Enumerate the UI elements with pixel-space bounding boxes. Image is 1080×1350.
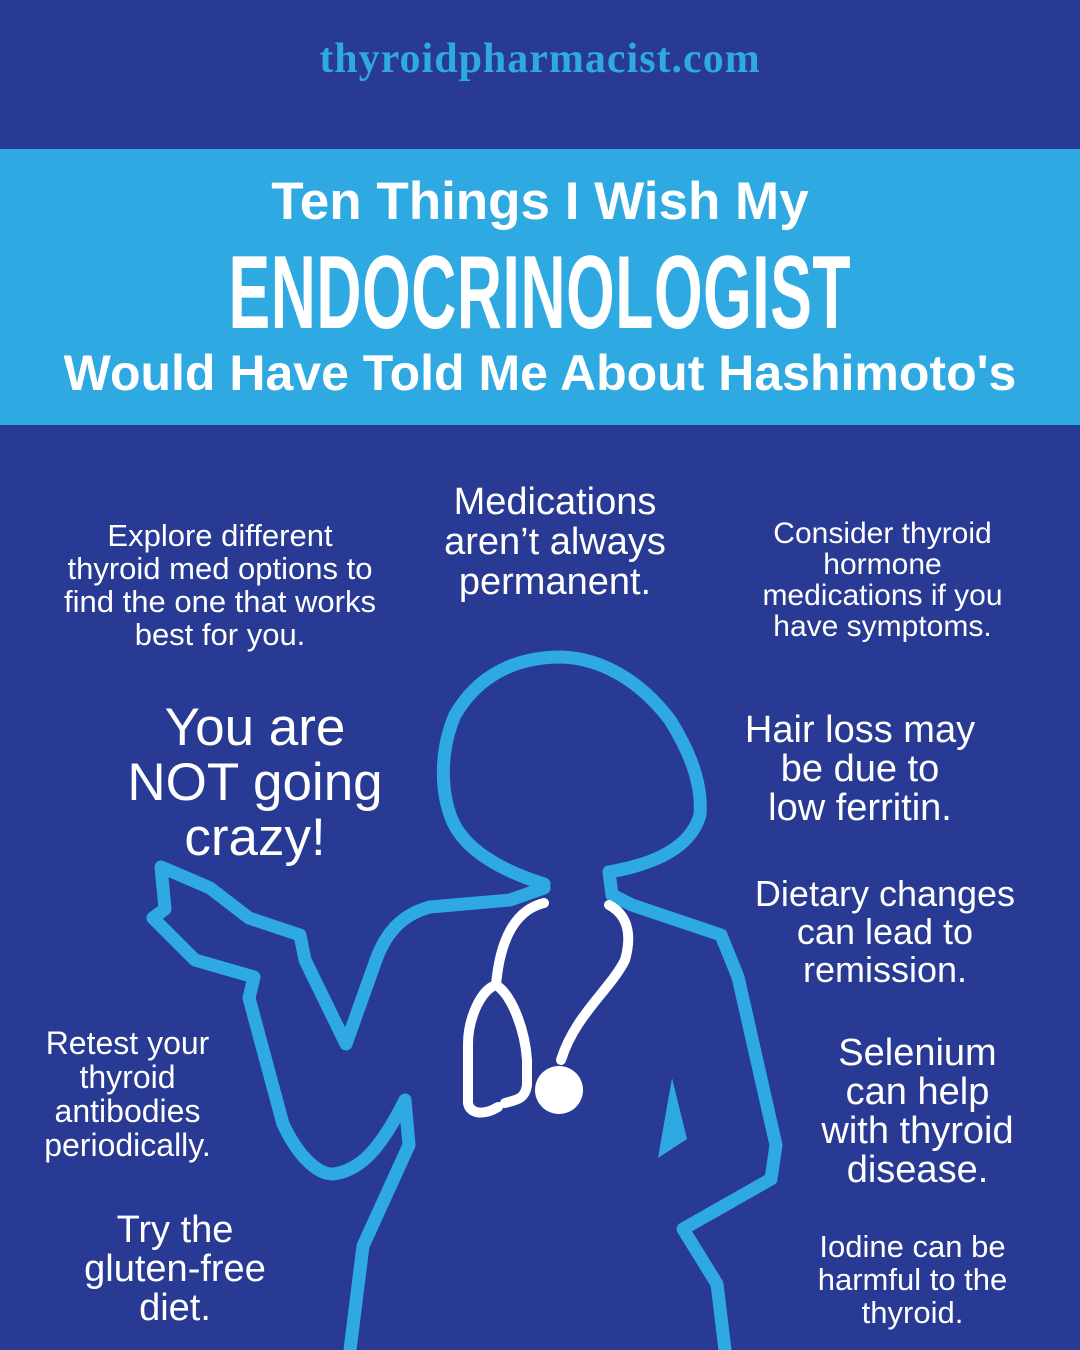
- tip: consider hormone: [762, 517, 1003, 643]
- tip: med options: thyroid med options to: [67, 551, 372, 586]
- tip: iodine: [818, 1229, 1007, 1330]
- lapel triangle: [658, 1078, 687, 1158]
- tip: retest antibodies: thyroid: [79, 1059, 176, 1095]
- tip: consider hormone: medications if you: [762, 579, 1003, 612]
- tip: iodine: thyroid.: [862, 1295, 963, 1330]
- tip: iodine: Iodine can be: [819, 1229, 1006, 1264]
- tip: hair loss: [745, 709, 975, 829]
- tip: selenium: with thyroid: [821, 1110, 1014, 1152]
- tip: gluten-free: gluten-free: [84, 1248, 266, 1290]
- tip: dietary changes: [755, 873, 1015, 990]
- tip: consider hormone: hormone: [823, 548, 942, 581]
- tip: consider hormone: have symptoms.: [773, 610, 992, 643]
- tip: retest antibodies: [44, 1025, 211, 1163]
- title line 3: Would Have Told Me About Hashimoto's: [64, 345, 1016, 401]
- tip: medications: [444, 481, 666, 603]
- tip: not going crazy: crazy!: [184, 808, 326, 867]
- head outline: [443, 657, 700, 884]
- title line 1: Ten Things I Wish My: [271, 172, 809, 231]
- tip: med options: [64, 518, 376, 652]
- tip: med options: find the one that works: [64, 584, 376, 619]
- website url: thyroidpharmacist.com: [319, 36, 761, 82]
- tip: gluten-free: diet.: [139, 1287, 211, 1329]
- tip: dietary changes: remission.: [803, 949, 967, 990]
- title banner: [0, 149, 1080, 425]
- tip: selenium: [821, 1032, 1014, 1191]
- tip: dietary changes: Dietary changes: [755, 873, 1015, 914]
- tip: med options: best for you.: [135, 617, 305, 652]
- tip: medications: aren’t always: [444, 521, 666, 563]
- tip: retest antibodies: Retest your: [46, 1025, 209, 1061]
- tip: medications: Medications: [454, 481, 656, 523]
- tip: gluten-free: [84, 1209, 266, 1329]
- tip: retest antibodies: periodically.: [44, 1127, 211, 1163]
- tip: selenium: can help: [846, 1071, 989, 1113]
- tip: hair loss: be due to: [781, 748, 939, 790]
- body outline: [153, 867, 544, 1350]
- stethoscope: [468, 903, 628, 1114]
- tip: hair loss: low ferritin.: [768, 787, 952, 829]
- tip: gluten-free: Try the: [117, 1209, 233, 1251]
- title main word: ENDOCRINOLOGIST: [229, 235, 851, 351]
- tip: not going crazy: You are: [165, 698, 345, 757]
- tip: hair loss: Hair loss may: [745, 709, 975, 751]
- tip: consider hormone: Consider thyroid: [773, 517, 992, 550]
- tip: selenium: Selenium: [838, 1032, 997, 1074]
- tip: not going crazy: NOT going: [127, 753, 383, 812]
- tip: not going crazy: [127, 698, 383, 867]
- tip: med options: Explore different: [107, 518, 333, 553]
- tip: iodine: harmful to the: [818, 1262, 1007, 1297]
- tip: selenium: disease.: [847, 1149, 988, 1191]
- tip: medications: permanent.: [459, 561, 651, 603]
- tip: dietary changes: can lead to: [797, 911, 973, 952]
- tip: retest antibodies: antibodies: [55, 1093, 200, 1129]
